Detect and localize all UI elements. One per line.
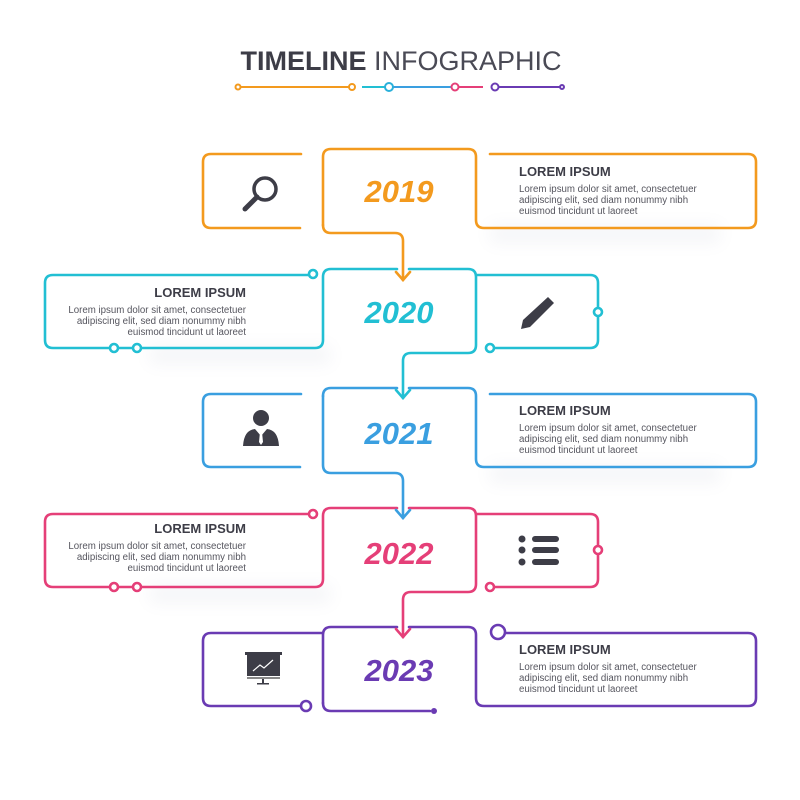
text block 2022: adipiscing elit, sed diam nonummy nibh [77,552,246,563]
text block 2019: adipiscing elit, sed diam nonummy nibh [519,195,688,206]
text block 2023 [519,642,697,695]
text block 2023: LOREM IPSUM [519,642,611,657]
year 2019: 2019 [364,174,434,209]
text block 2023: Lorem ipsum dolor sit amet, consectetuer [519,662,697,673]
title: TIMELINE INFOGRAPHIC [240,46,562,76]
text block 2023: adipiscing elit, sed diam nonummy nibh [519,673,688,684]
text block 2019: euismod tincidunt ut laoreet [519,206,638,217]
text block 2021: LOREM IPSUM [519,403,611,418]
row 2020 [45,269,602,398]
year 2021: 2021 [364,416,433,451]
text block 2021 [519,403,697,456]
text block 2023: euismod tincidunt ut laoreet [519,684,638,695]
text block 2019: Lorem ipsum dolor sit amet, consectetuer [519,184,697,195]
icon: presentation board [245,652,282,684]
icon: checklist [518,536,559,566]
text block 2021: Lorem ipsum dolor sit amet, consectetuer [519,423,697,434]
year 2020: 2020 [364,295,433,330]
icon: magnifier [245,178,276,209]
text block 2019: LOREM IPSUM [519,164,611,179]
text block 2020: euismod tincidunt ut laoreet [128,327,246,338]
row 2022 [45,508,602,637]
text block 2022: euismod tincidunt ut laoreet [128,563,246,574]
text block 2020 [68,285,247,338]
text block 2020: Lorem ipsum dolor sit amet, consectetuer [68,305,247,316]
text block 2020: LOREM IPSUM [154,285,246,300]
row 2023 [203,625,756,711]
title underline [236,83,564,91]
shadows [150,225,720,603]
arrow into 2021 [396,390,410,398]
text block 2021: euismod tincidunt ut laoreet [519,445,638,456]
text block 2019 [519,164,697,217]
text block 2022 [68,521,247,574]
year 2022: 2022 [364,536,433,571]
text block 2020: adipiscing elit, sed diam nonummy nibh [77,316,246,327]
text block 2021: adipiscing elit, sed diam nonummy nibh [519,434,688,445]
row 2019 [203,149,756,280]
arrow into 2022 [396,510,410,518]
row 2021 [203,388,756,518]
text block 2022: Lorem ipsum dolor sit amet, consectetuer [68,541,247,552]
text block 2022: LOREM IPSUM [154,521,246,536]
year 2023: 2023 [364,653,433,688]
icon: person [243,410,279,446]
arrow into 2020 [396,272,410,280]
icon: pencil [521,297,554,329]
arrow into 2023 [396,629,410,637]
